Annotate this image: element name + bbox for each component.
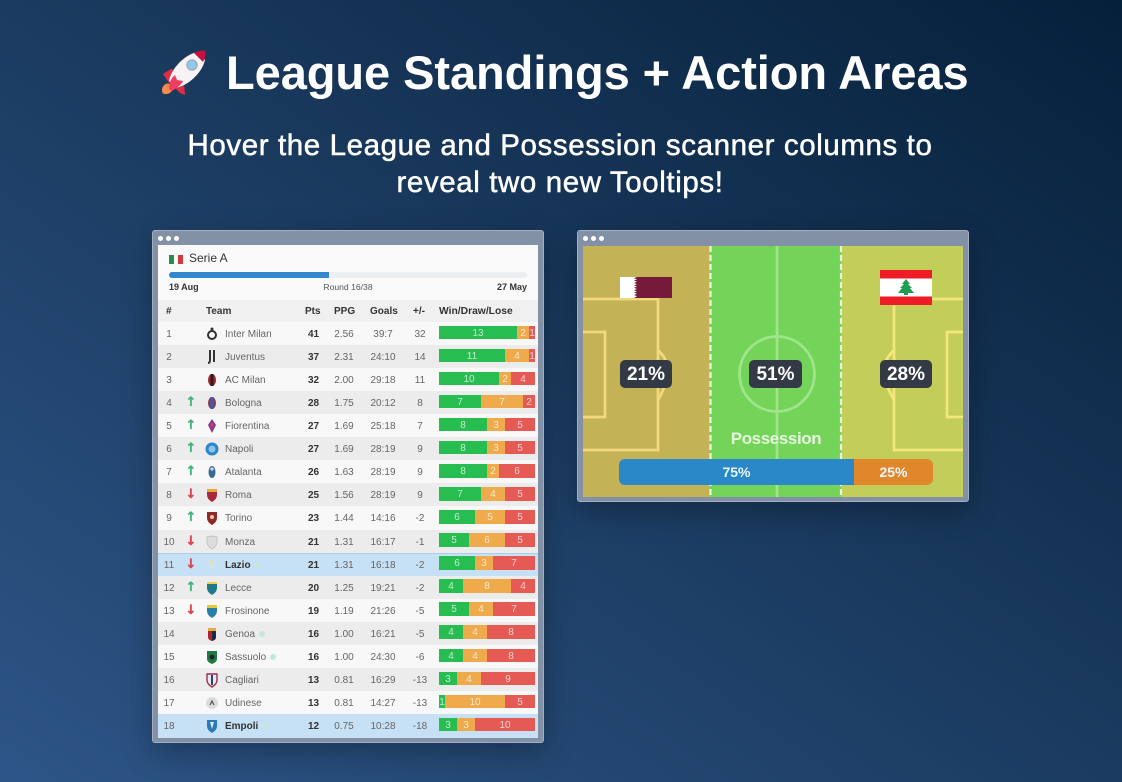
row: Lecce: 12 bbox=[163, 583, 175, 594]
row: Inter Milan: 39:7 bbox=[373, 329, 393, 340]
row: Empoli: 3 bbox=[463, 720, 469, 731]
row: Cagliari: 0.81 bbox=[334, 675, 354, 686]
stat: left third 21%: 21% bbox=[627, 364, 665, 385]
row: Sassuolo: 1.00 bbox=[334, 652, 354, 663]
row: Juventus: Juventus bbox=[225, 352, 265, 363]
row: Atalanta: 6 bbox=[514, 466, 520, 477]
row: Fiorentina: 5 bbox=[166, 421, 172, 432]
row: Genoa: 1.00 bbox=[334, 629, 354, 640]
icon: Italy flag bbox=[169, 255, 183, 264]
row: Sassuolo: 4 bbox=[472, 651, 478, 662]
row: Frosinone: 13 bbox=[163, 606, 175, 617]
row: Lecce: 1.25 bbox=[334, 583, 354, 594]
row: Monza: 5 bbox=[517, 535, 523, 546]
row: Juventus: 11 bbox=[467, 351, 477, 362]
row: AC Milan: 29:18 bbox=[370, 375, 396, 386]
row: Lazio: 3 bbox=[481, 558, 487, 569]
row: Genoa: 8 bbox=[508, 627, 514, 638]
row: Juventus: 2 bbox=[166, 352, 172, 363]
row: Sassuolo: 8 bbox=[508, 651, 514, 662]
row: Sassuolo: -6 bbox=[416, 652, 424, 663]
icon: Lebanon flag bbox=[880, 270, 932, 305]
row: Monza: 6 bbox=[484, 535, 490, 546]
row: Udinese: 14:27 bbox=[370, 698, 396, 709]
row: Cagliari: 3 bbox=[445, 674, 451, 685]
league name: Serie A bbox=[189, 251, 228, 265]
row: Torino: 23 bbox=[308, 513, 319, 524]
round label: Round 16/38 bbox=[323, 282, 373, 292]
row: Lecce: Lecce bbox=[225, 583, 252, 594]
row: Empoli: 3 bbox=[445, 720, 451, 731]
row: Fiorentina: ↑ bbox=[186, 418, 196, 433]
row: Napoli: 8 bbox=[460, 443, 466, 454]
row: Atalanta: 2 bbox=[490, 466, 496, 477]
row: Roma: 9 bbox=[417, 490, 423, 501]
row: Napoli: 5 bbox=[517, 443, 523, 454]
row: Napoli: 27 bbox=[308, 444, 319, 455]
subtitle bbox=[188, 129, 932, 199]
title: League Standings + Action Areas bbox=[226, 46, 969, 99]
row: Bologna: 8 bbox=[417, 398, 423, 409]
row: Bologna: ↑ bbox=[186, 395, 196, 410]
row: Torino: Torino bbox=[225, 513, 252, 524]
row: Genoa bbox=[158, 622, 538, 645]
row: Lazio bbox=[158, 553, 538, 576]
row: Sassuolo bbox=[158, 645, 538, 668]
row: Frosinone: Frosinone bbox=[225, 606, 269, 617]
row: Atalanta: 8 bbox=[460, 466, 466, 477]
row: Lecce: 8 bbox=[484, 581, 490, 592]
row: Lazio: 21 bbox=[308, 560, 319, 571]
row: Inter Milan bbox=[158, 322, 538, 345]
row: Cagliari: 4 bbox=[466, 674, 472, 685]
column headers: Pts bbox=[305, 306, 321, 317]
row: Cagliari: 16:29 bbox=[370, 675, 396, 686]
row: Lecce: 20 bbox=[308, 583, 319, 594]
row: Bologna: Bologna bbox=[225, 398, 262, 409]
row: Napoli: 28:19 bbox=[370, 444, 396, 455]
row: Torino: 5 bbox=[487, 512, 493, 523]
row: Torino: ↑ bbox=[186, 510, 196, 525]
row: Bologna bbox=[158, 391, 538, 414]
row: Juventus: 14 bbox=[414, 352, 426, 363]
row: Atalanta: 28:19 bbox=[370, 467, 396, 478]
row: Atalanta: Atalanta bbox=[225, 467, 262, 478]
row: Roma bbox=[158, 483, 538, 506]
row: Fiorentina: 25:18 bbox=[370, 421, 396, 432]
possession label: Possession bbox=[731, 429, 821, 448]
row: Bologna: 20:12 bbox=[370, 398, 396, 409]
row: Roma: 8 bbox=[166, 490, 172, 501]
row: Atalanta: 9 bbox=[417, 467, 423, 478]
row: Bologna: 4 bbox=[166, 398, 172, 409]
row: Udinese: 0.81 bbox=[334, 698, 354, 709]
row: AC Milan: 4 bbox=[520, 374, 526, 385]
row: Atalanta: 26 bbox=[308, 467, 319, 478]
row: Torino: 5 bbox=[517, 512, 523, 523]
row: Cagliari bbox=[158, 668, 538, 691]
row: Lazio: 16:18 bbox=[370, 560, 396, 571]
row: Monza: -1 bbox=[416, 537, 424, 548]
row: Inter Milan: 1 bbox=[166, 329, 172, 340]
column headers: +/- bbox=[413, 306, 425, 317]
row: Inter Milan: 13 bbox=[472, 328, 484, 339]
row: Udinese: 17 bbox=[163, 698, 175, 709]
panel: possession window bbox=[577, 230, 969, 502]
row: Lazio: 1.31 bbox=[334, 560, 354, 571]
row: Fiorentina: 27 bbox=[308, 421, 319, 432]
row: Udinese: Udinese bbox=[225, 698, 262, 709]
column headers bbox=[158, 300, 538, 322]
row: Juventus: 4 bbox=[514, 351, 520, 362]
row: Napoli: 3 bbox=[493, 443, 499, 454]
row: AC Milan: 10 bbox=[463, 374, 475, 385]
row: AC Milan: AC Milan bbox=[225, 375, 266, 386]
possession bar bbox=[619, 459, 933, 485]
row: Frosinone bbox=[158, 599, 538, 622]
row: Sassuolo: Sassuolo bbox=[225, 652, 266, 663]
row: Inter Milan: 2.56 bbox=[334, 329, 354, 340]
row: AC Milan bbox=[158, 368, 538, 391]
home share 75% bbox=[619, 459, 854, 485]
row: AC Milan: 3 bbox=[166, 375, 172, 386]
row: Monza: ↓ bbox=[186, 534, 196, 549]
icon: rocket bbox=[162, 50, 206, 95]
icon: Qatar flag bbox=[620, 277, 672, 298]
season start: 19 Aug bbox=[169, 282, 199, 292]
row: Sassuolo: 4 bbox=[448, 651, 454, 662]
row: Genoa: 4 bbox=[472, 627, 478, 638]
row: Genoa: 4 bbox=[448, 627, 454, 638]
row: Udinese: 1 bbox=[439, 697, 445, 708]
column headers: Win/Draw/Lose bbox=[439, 306, 513, 317]
row: Genoa: 14 bbox=[163, 629, 175, 640]
row: Genoa: 16:21 bbox=[370, 629, 396, 640]
row: Inter Milan: 32 bbox=[414, 329, 426, 340]
row: AC Milan: 2 bbox=[502, 374, 508, 385]
row: Udinese bbox=[158, 691, 538, 714]
row: Napoli bbox=[158, 437, 538, 460]
row: Atalanta bbox=[158, 460, 538, 483]
row: Juventus: 1 bbox=[529, 351, 535, 362]
league header bbox=[158, 245, 538, 300]
away share 25% bbox=[854, 459, 933, 485]
row: Inter Milan: 41 bbox=[308, 329, 319, 340]
row: Roma: 5 bbox=[517, 489, 523, 500]
row: Roma: ↓ bbox=[186, 487, 196, 502]
row: Napoli: ↑ bbox=[186, 441, 196, 456]
row: Juventus: 37 bbox=[308, 352, 319, 363]
row: Juventus bbox=[158, 345, 538, 368]
row: Monza: 16:17 bbox=[370, 537, 396, 548]
row: Sassuolo: 15 bbox=[163, 652, 175, 663]
row: Fiorentina: Fiorentina bbox=[225, 421, 269, 432]
row: Lecce: -2 bbox=[416, 583, 424, 594]
subtitle: Hover the League and Possession scanner columns to bbox=[188, 129, 932, 162]
row: Empoli: 10 bbox=[499, 720, 511, 731]
row: Roma: 1.56 bbox=[334, 490, 354, 501]
row: Torino: -2 bbox=[416, 513, 424, 524]
row: Roma: 7 bbox=[457, 489, 463, 500]
row: Atalanta: 1.63 bbox=[334, 467, 354, 478]
row: Empoli bbox=[158, 714, 538, 738]
row: Inter Milan: 1 bbox=[529, 328, 535, 339]
row: Juventus: 24:10 bbox=[370, 352, 396, 363]
column headers: Team bbox=[206, 306, 231, 317]
row: AC Milan: 11 bbox=[415, 375, 425, 386]
row: Monza: 10 bbox=[163, 537, 175, 548]
row: Roma: 25 bbox=[308, 490, 319, 501]
season end: 27 May bbox=[497, 282, 527, 292]
row: Lecce bbox=[158, 576, 538, 599]
row: Lazio: ↓ bbox=[186, 557, 196, 572]
row: Bologna: 28 bbox=[308, 398, 319, 409]
row: Empoli: 0.75 bbox=[334, 721, 354, 732]
stat: right third 28% bbox=[880, 360, 932, 388]
row: Lazio: 7 bbox=[511, 558, 517, 569]
stat: left third 21% bbox=[620, 360, 672, 388]
row: Empoli: 10:28 bbox=[370, 721, 396, 732]
stat: middle third 51% bbox=[749, 360, 802, 388]
row: Napoli: 6 bbox=[166, 444, 172, 455]
stat: middle third 51%: 51% bbox=[756, 364, 795, 385]
row: Bologna: 1.75 bbox=[334, 398, 354, 409]
row: Monza: 1.31 bbox=[334, 537, 354, 548]
row: Lecce: 19:21 bbox=[370, 583, 396, 594]
row: Napoli: Napoli bbox=[225, 444, 253, 455]
home share 75%: 75% bbox=[722, 464, 751, 480]
row: Genoa: Genoa bbox=[225, 629, 255, 640]
row: Fiorentina: 1.69 bbox=[334, 421, 354, 432]
row: Fiorentina: 7 bbox=[417, 421, 423, 432]
league table bbox=[158, 245, 538, 738]
row: Lecce: ↑ bbox=[186, 580, 196, 595]
row: Frosinone: 21:26 bbox=[370, 606, 396, 617]
panel: league table window bbox=[152, 230, 544, 743]
row: Torino bbox=[158, 506, 538, 530]
row: Empoli: -18 bbox=[413, 721, 427, 732]
column headers: Goals bbox=[370, 306, 398, 317]
row: Frosinone: 7 bbox=[511, 604, 517, 615]
row: Frosinone: ↓ bbox=[186, 603, 196, 618]
row: Roma: 4 bbox=[490, 489, 496, 500]
row: Lazio: Lazio bbox=[225, 560, 251, 571]
row: Fiorentina: 5 bbox=[517, 420, 523, 431]
row: Roma: Roma bbox=[225, 490, 252, 501]
row: Frosinone: 5 bbox=[451, 604, 457, 615]
row: Sassuolo: 16 bbox=[308, 652, 319, 663]
row: Cagliari: 13 bbox=[308, 675, 319, 686]
away share 25%: 25% bbox=[879, 464, 908, 480]
row: AC Milan: 32 bbox=[308, 375, 319, 386]
row: Cagliari: 16 bbox=[163, 675, 175, 686]
row: Torino: 1.44 bbox=[334, 513, 354, 524]
row: Fiorentina: 3 bbox=[493, 420, 499, 431]
column headers: # bbox=[166, 306, 172, 317]
row: Roma: 28:19 bbox=[370, 490, 396, 501]
row: Juventus: 2.31 bbox=[334, 352, 354, 363]
column headers: PPG bbox=[334, 306, 355, 317]
row: Bologna: 2 bbox=[526, 397, 532, 408]
row: Napoli: 9 bbox=[417, 444, 423, 455]
row: Frosinone: -5 bbox=[416, 606, 424, 617]
row: Empoli: 12 bbox=[308, 721, 319, 732]
row: Monza: 21 bbox=[308, 537, 319, 548]
subtitle: reveal two new Tooltips! bbox=[396, 166, 724, 199]
row: Udinese: 5 bbox=[517, 697, 523, 708]
row: Fiorentina bbox=[158, 414, 538, 437]
season progress bar bbox=[169, 272, 527, 278]
row: Udinese: -13 bbox=[413, 698, 427, 709]
row: Monza bbox=[158, 530, 538, 553]
row: Bologna: 7 bbox=[499, 397, 505, 408]
row: Lecce: 4 bbox=[448, 581, 454, 592]
row: Monza: 5 bbox=[451, 535, 457, 546]
row: Lecce: 4 bbox=[520, 581, 526, 592]
row: Monza: Monza bbox=[225, 537, 255, 548]
row: Inter Milan: 2 bbox=[520, 328, 526, 339]
row: Torino: 9 bbox=[166, 513, 172, 524]
row: Genoa: 16 bbox=[308, 629, 319, 640]
row: Udinese: 13 bbox=[308, 698, 319, 709]
row: Cagliari: 9 bbox=[505, 674, 511, 685]
row: Cagliari: Cagliari bbox=[225, 675, 259, 686]
stat: right third 28%: 28% bbox=[887, 364, 925, 385]
pitch with action areas bbox=[583, 246, 963, 497]
row: Empoli: 18 bbox=[163, 721, 175, 732]
row: AC Milan: 2.00 bbox=[334, 375, 354, 386]
row: Frosinone: 4 bbox=[478, 604, 484, 615]
row: Torino: 6 bbox=[454, 512, 460, 523]
row: Atalanta: ↑ bbox=[186, 464, 196, 479]
row: Napoli: 1.69 bbox=[334, 444, 354, 455]
row: Torino: 14:16 bbox=[370, 513, 396, 524]
row: Atalanta: 7 bbox=[166, 467, 172, 478]
row: Udinese: 10 bbox=[469, 697, 481, 708]
row: Frosinone: 19 bbox=[308, 606, 319, 617]
row: Frosinone: 1.19 bbox=[334, 606, 354, 617]
row: Genoa: -5 bbox=[416, 629, 424, 640]
row: Lazio: 11 bbox=[164, 560, 174, 571]
row: Cagliari: -13 bbox=[413, 675, 427, 686]
row: Lazio: 6 bbox=[454, 558, 460, 569]
row: Empoli: Empoli bbox=[225, 721, 258, 732]
row: Sassuolo: 24:30 bbox=[370, 652, 396, 663]
row: Lazio: -2 bbox=[416, 560, 424, 571]
row: Inter Milan: Inter Milan bbox=[225, 329, 272, 340]
row: Fiorentina: 8 bbox=[460, 420, 466, 431]
row: Bologna: 7 bbox=[457, 397, 463, 408]
